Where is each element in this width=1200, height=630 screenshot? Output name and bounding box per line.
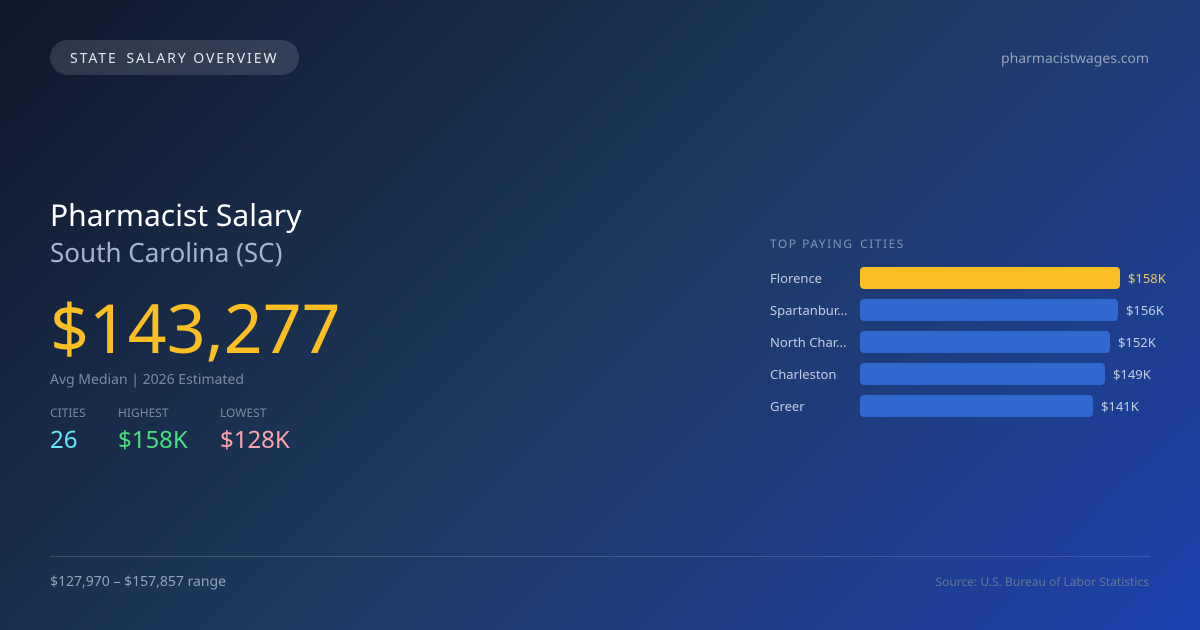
- site name: pharmacistwages.com: [1001, 49, 1149, 68]
- bar chart: top paying cities: [770, 267, 1166, 417]
- stat label: lowest: LOWEST: [220, 404, 266, 421]
- value: Charleston: $149K: [1113, 365, 1151, 383]
- badge: state salary overview: [50, 40, 299, 75]
- bar: Florence: [860, 267, 1120, 289]
- stat value: highest: $158K: [118, 423, 188, 456]
- row label: Spartanburg: Spartanbur...: [770, 301, 848, 319]
- stat value: cities: 26: [50, 423, 77, 456]
- stat: cities: [50, 404, 86, 456]
- bar: Greer: [860, 395, 1093, 417]
- headline salary: $143,277: [50, 280, 340, 373]
- row label: North Charleston: North Char...: [770, 333, 847, 351]
- salary caption: Avg Median | 2026 Estimated: [50, 370, 244, 389]
- row label: Greer: Greer: [770, 397, 805, 415]
- bar: Charleston: [860, 363, 1105, 385]
- stat label: cities: CITIES: [50, 404, 86, 421]
- title: Pharmacist Salary: [50, 194, 302, 235]
- subtitle: state: South Carolina (SC): [50, 234, 282, 270]
- source: Source: U.S. Bureau of Labor Statistics: [936, 573, 1149, 590]
- stat: lowest: [220, 404, 290, 456]
- badge: state salary overview: STATE SALARY OVERVIEW: [70, 49, 278, 68]
- bar: North Charleston: [860, 331, 1110, 353]
- row label: Florence: Florence: [770, 269, 822, 287]
- value: Greer: $141K: [1101, 397, 1139, 415]
- row label: Charleston: Charleston: [770, 365, 836, 383]
- stat value: lowest: $128K: [220, 423, 290, 456]
- value: Florence: $158K: [1128, 269, 1166, 287]
- value: Spartanburg: $156K: [1126, 301, 1164, 319]
- bar: Spartanburg: [860, 299, 1118, 321]
- chart heading: TOP PAYING CITIES: [770, 235, 905, 252]
- value: North Charleston: $152K: [1118, 333, 1156, 351]
- stat label: highest: HIGHEST: [118, 404, 169, 421]
- stat: highest: [118, 404, 188, 456]
- salary range: $127,970 – $157,857 range: [50, 572, 226, 591]
